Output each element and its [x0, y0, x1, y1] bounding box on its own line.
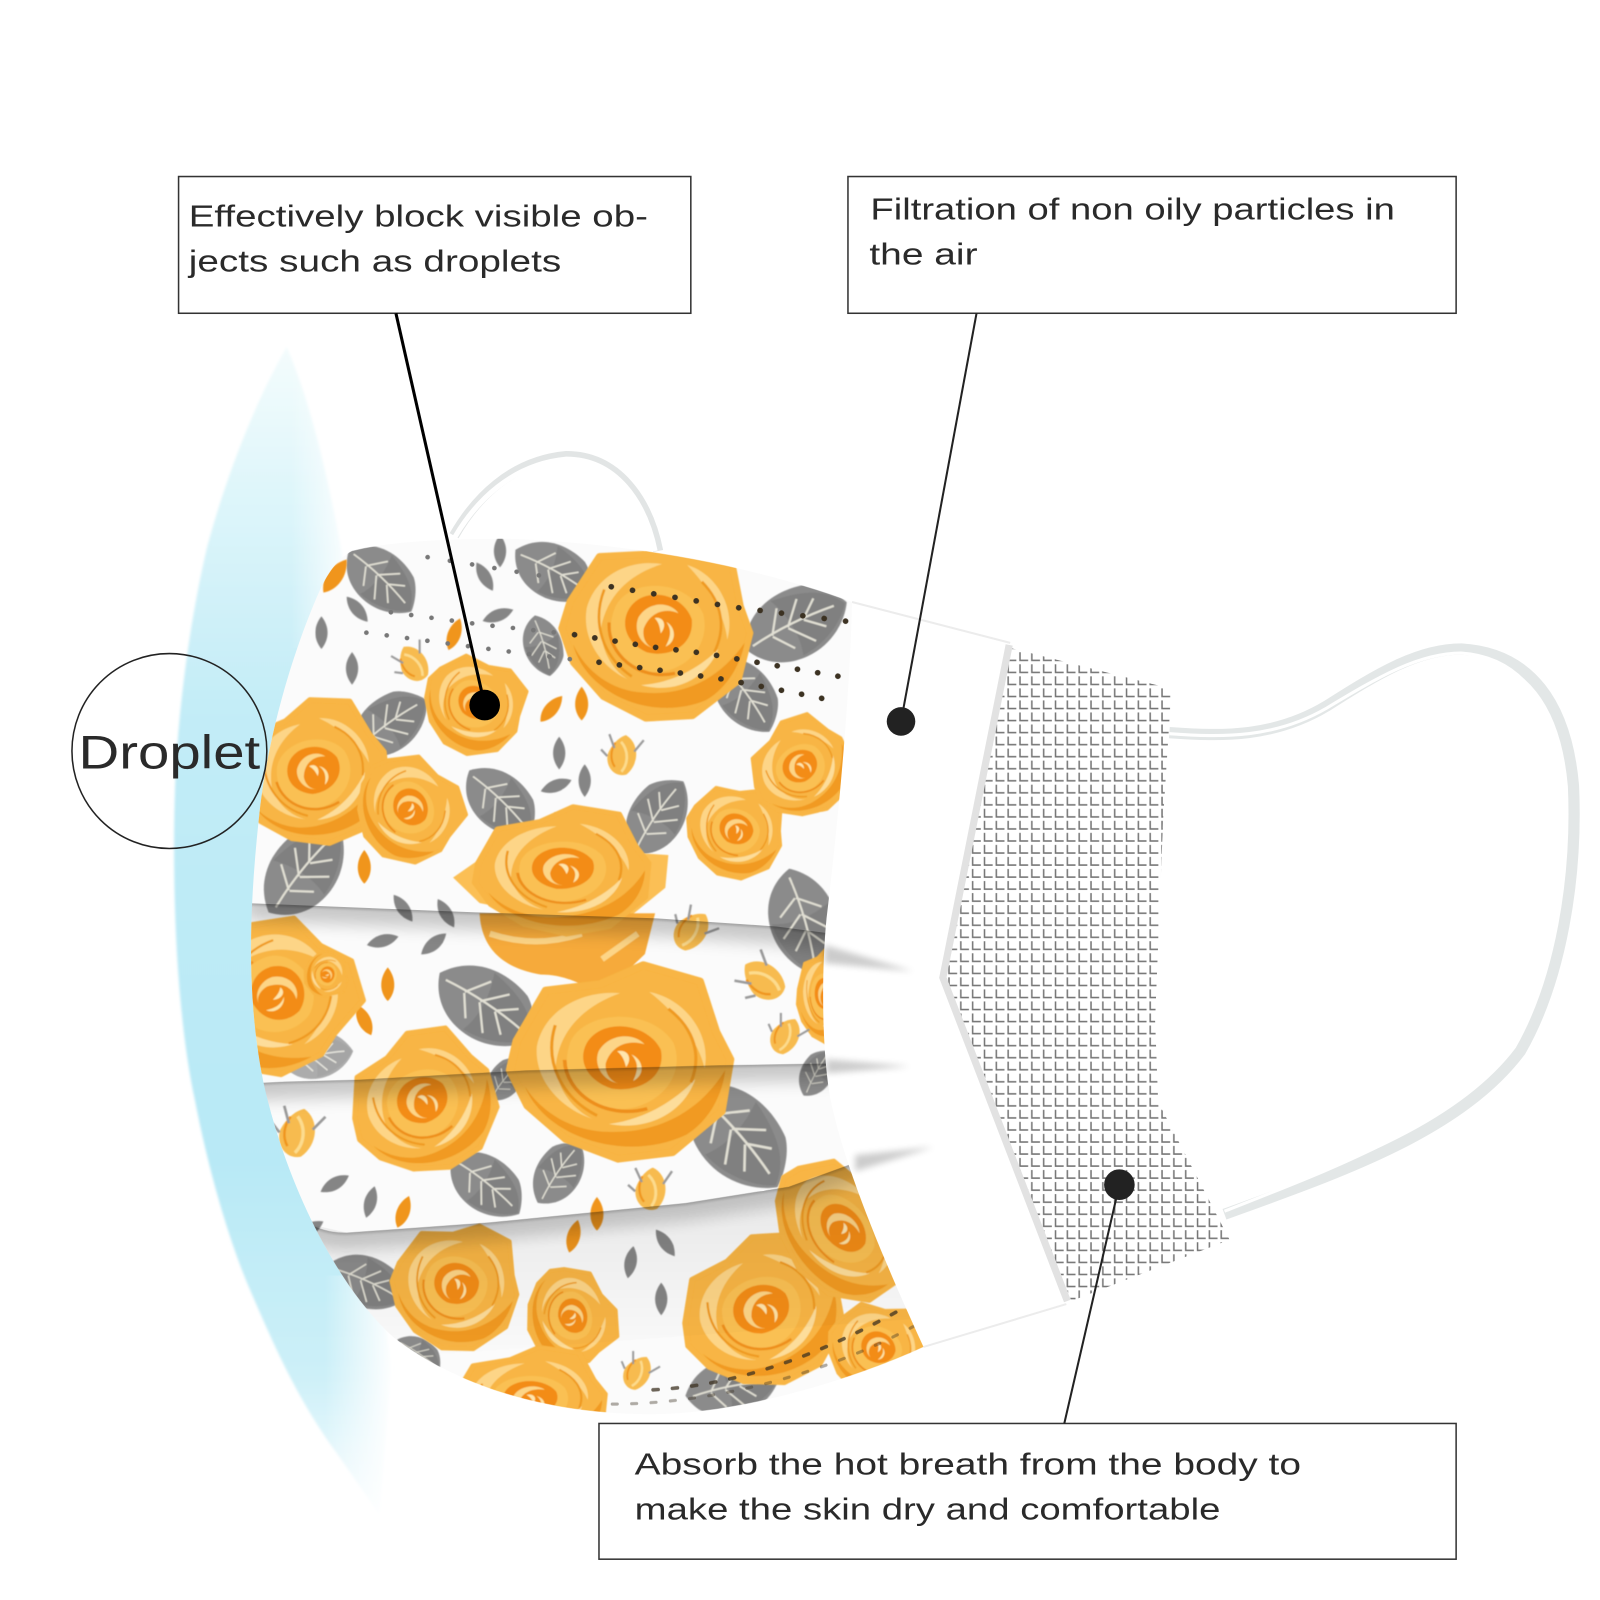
small petals — [292, 535, 680, 1315]
lower panel shading — [317, 1165, 898, 1290]
pleat 3 shadow on print — [276, 1158, 867, 1233]
callout box: block droplets: Effectively block visible ob- — [189, 200, 648, 234]
leader line: inner layer — [1064, 1169, 1135, 1423]
leader line: middle layer — [887, 313, 977, 736]
right ear loop — [1169, 649, 1574, 1214]
droplet label: Droplet — [79, 726, 260, 778]
left ear loop — [454, 456, 658, 551]
callout box: filtration — [848, 177, 1456, 313]
callout box: filtration: the air — [869, 237, 978, 271]
shield fill — [174, 347, 392, 1514]
band seam — [943, 645, 1067, 1301]
large rose side petals — [453, 852, 668, 918]
droplet label — [72, 654, 267, 848]
mask body — [251, 538, 1070, 1412]
leader line: outer layer — [396, 313, 500, 720]
rose buds — [266, 638, 810, 1396]
rose group — [251, 550, 924, 1412]
large rose lower petals — [478, 912, 656, 984]
blue droplet shield — [174, 342, 394, 1526]
top fade — [291, 342, 354, 648]
band outline — [852, 602, 1066, 1347]
pleat 1 shadow on print — [245, 903, 832, 934]
bottom fade — [324, 1276, 394, 1526]
mesh inner layer panel — [944, 648, 1230, 1301]
callout box: absorb breath: Absorb the hot breath from the body to — [635, 1447, 1301, 1481]
pleat tapers on white band — [824, 945, 934, 1171]
stitching dots: dark right section — [574, 587, 913, 1404]
callout box: absorb breath: make the skin dry and comfortable — [635, 1492, 1220, 1526]
callout box: block droplets: jects such as droplets — [188, 244, 561, 278]
callout box: absorb breath — [599, 1423, 1456, 1559]
white edge band — [821, 602, 1066, 1347]
orange buds — [317, 555, 603, 1254]
pleat 2 shadow on print — [245, 1063, 837, 1084]
stitching dots: faint left section — [366, 557, 587, 661]
callout box: block droplets — [179, 177, 691, 313]
printed floral fabric — [251, 538, 924, 1412]
leaf group — [243, 526, 860, 1424]
callout box: filtration: Filtration of non oily particles in — [870, 192, 1395, 226]
